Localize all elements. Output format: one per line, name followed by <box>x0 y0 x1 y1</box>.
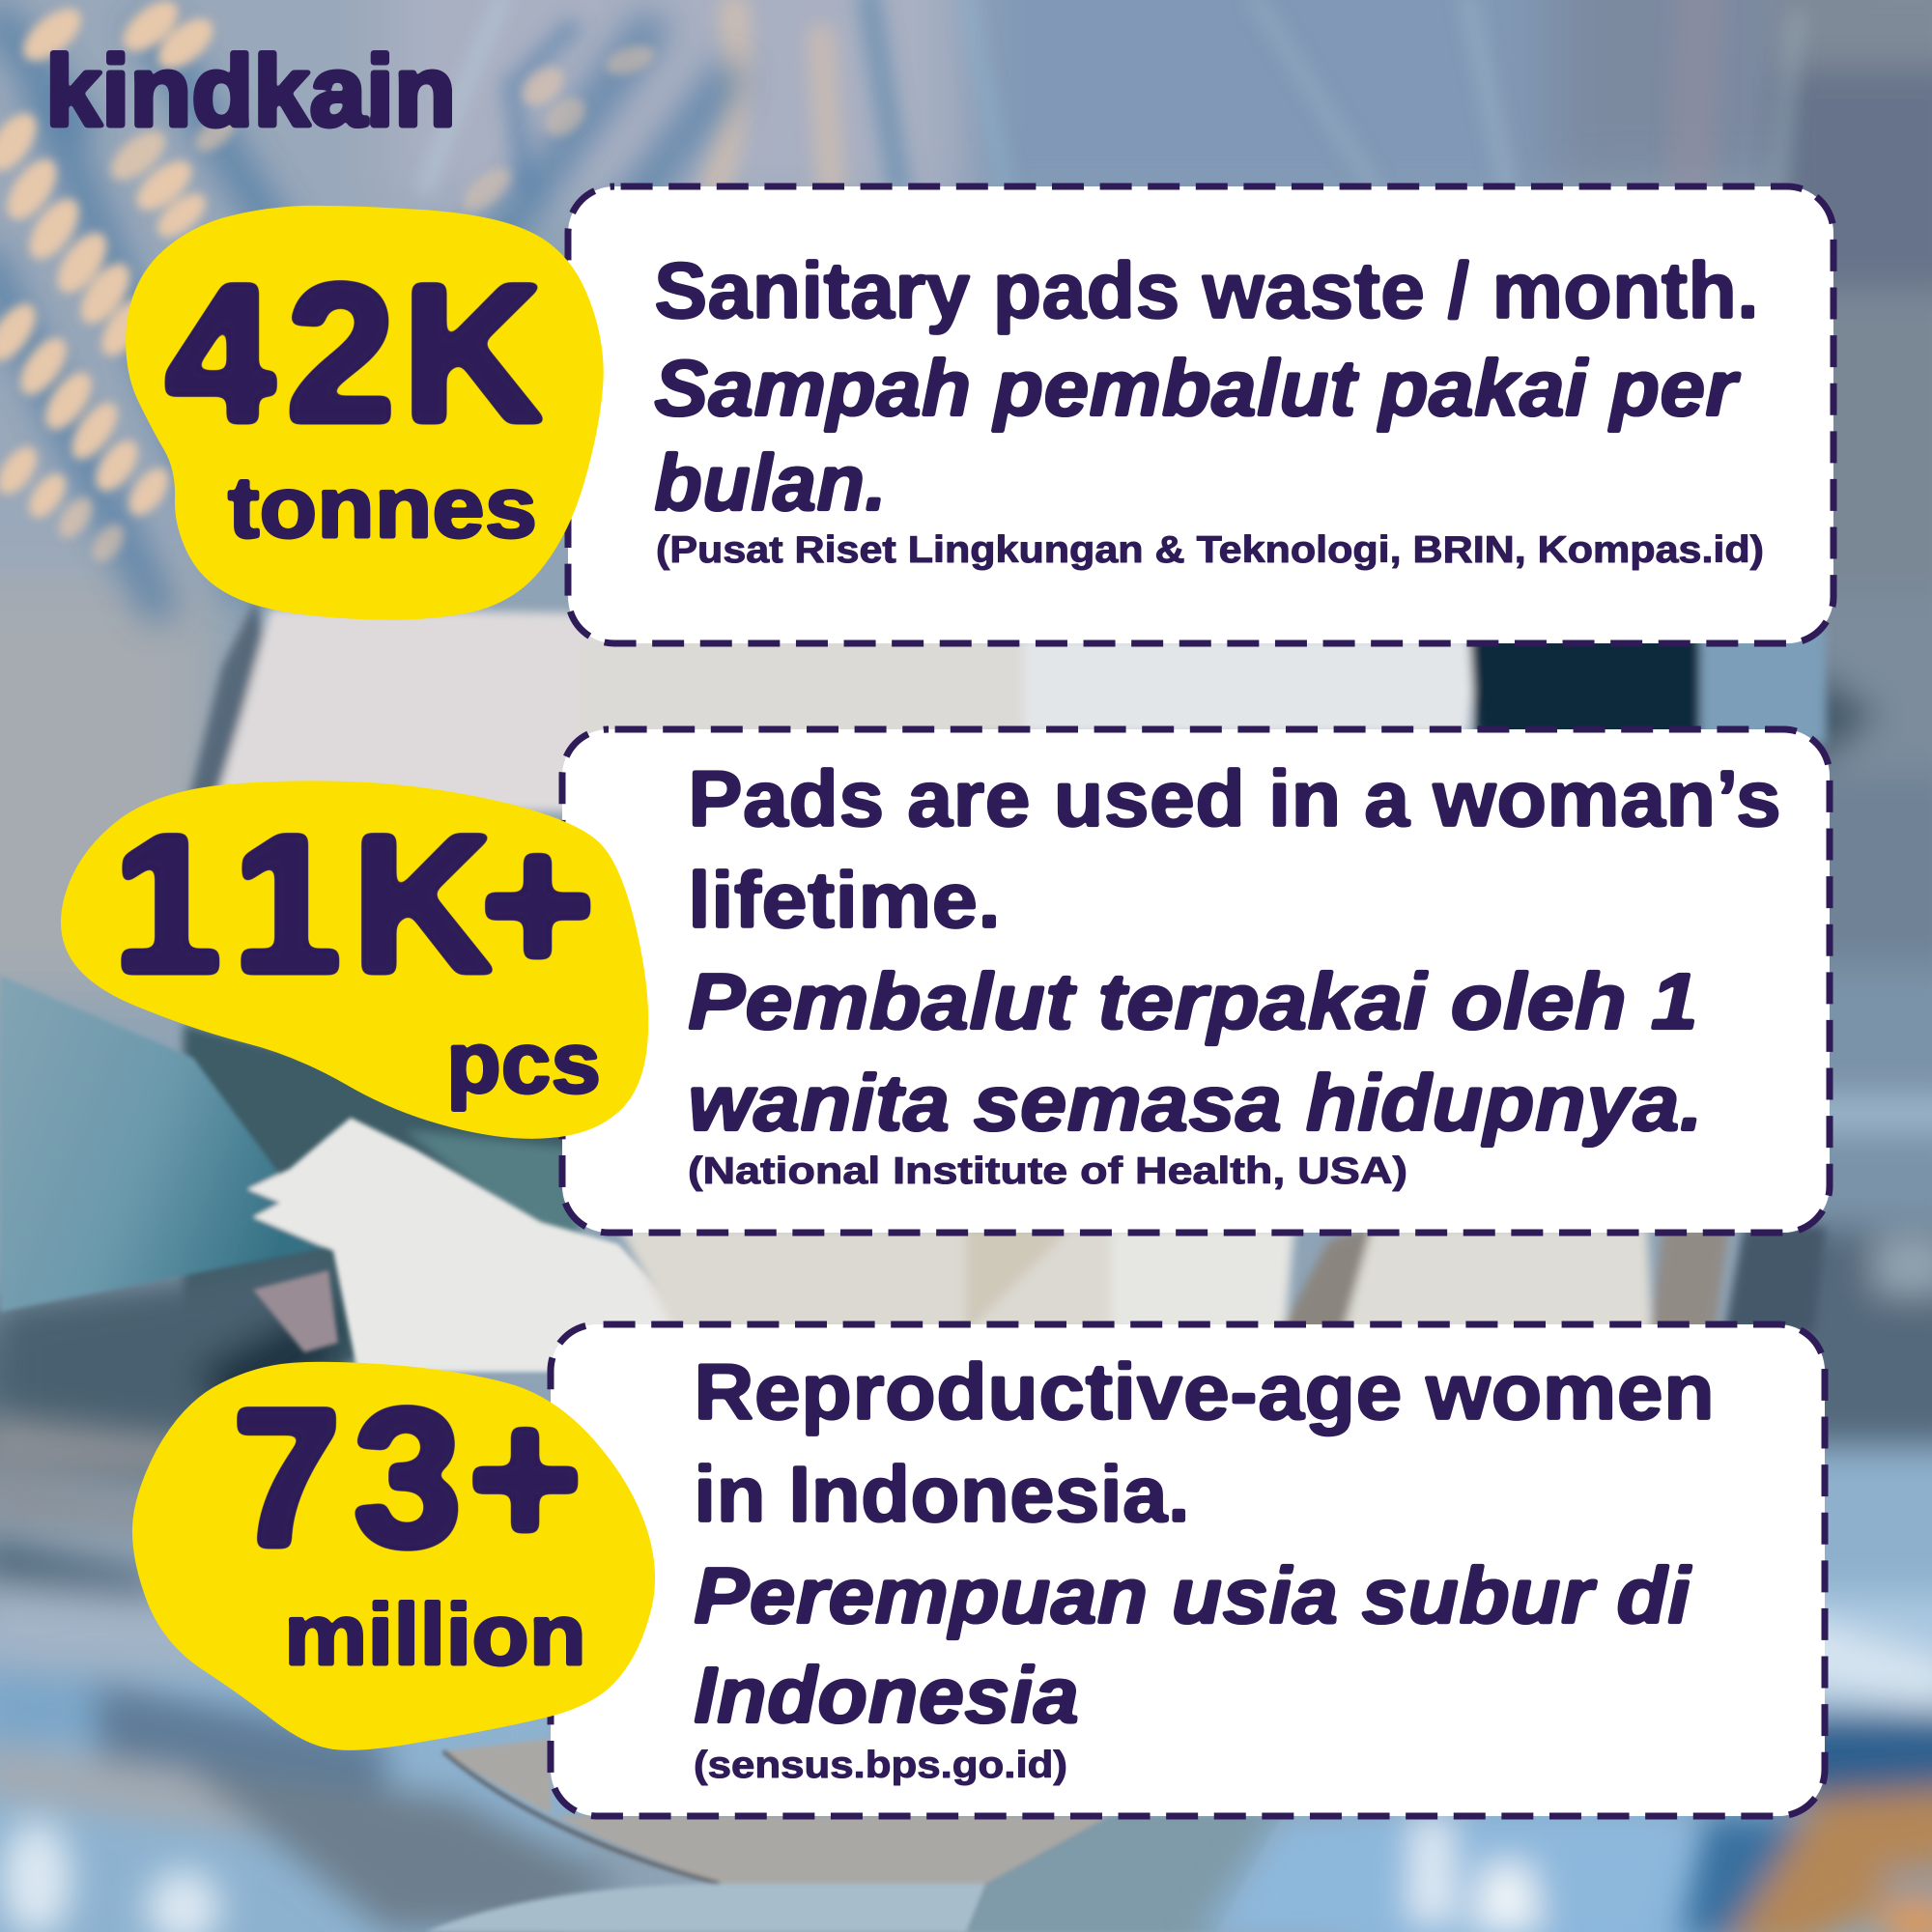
text block: Indonesian description: Pembalut terpakai oleh 1 <box>688 956 1698 1046</box>
panel: sanitary pads waste <box>568 186 1833 643</box>
panel: pads per lifetime <box>562 729 1830 1233</box>
right edge streaks <box>1681 0 1932 1932</box>
number: 73+ <box>232 1368 582 1588</box>
heading: English stat description <box>694 1347 1715 1539</box>
logo: kindkain: kindkain <box>45 36 456 148</box>
teal plastic and dark hollow, left <box>184 1024 580 1372</box>
text block: Indonesian description <box>654 343 1742 527</box>
heading: English stat description: Reproductive-age women <box>694 1347 1715 1436</box>
source citation: (Pusat Riset Lingkungan & Teknologi, BRIN, Kompas.id) <box>656 529 1764 571</box>
callout: 73+ million <box>132 1362 655 1750</box>
text block: Indonesian description: Sampah pembalut pakai per <box>654 343 1742 433</box>
plastic wisps along top band <box>425 0 1797 188</box>
number: 11K+ <box>112 794 595 1014</box>
number: 42K <box>165 243 544 464</box>
lower-left blurred plastic streaks <box>0 1415 628 1932</box>
unit: million <box>284 1587 586 1684</box>
sack and bottom plastic <box>425 1739 1282 1932</box>
panel: reproductive-age women <box>551 1324 1825 1816</box>
source citation: (sensus.bps.go.id) <box>694 1745 1067 1786</box>
callout: 11K+ pcs <box>61 781 648 1139</box>
heading: English stat description: Pads are used in a woman’s <box>688 753 1781 843</box>
unit: pcs <box>446 1015 601 1112</box>
text block: Indonesian description: bulan. <box>654 438 887 527</box>
unit: tonnes <box>228 460 537 556</box>
woven basket pattern top-left <box>0 0 734 618</box>
text block: Indonesian description: Indonesia <box>694 1650 1079 1740</box>
text block: Indonesian description: wanita semasa hidupnya. <box>688 1058 1703 1148</box>
text block: Indonesian description: Perempuan usia subur di <box>694 1550 1692 1640</box>
text block: Indonesian description <box>688 956 1703 1148</box>
heading: English stat description: Sanitary pads waste / month. <box>654 245 1759 335</box>
callout: 42K tonnes <box>126 206 604 620</box>
white pads and mid band <box>188 599 1826 840</box>
text block: Indonesian description <box>694 1550 1692 1740</box>
band between second and third panels <box>618 1227 1826 1333</box>
heading: English stat description: in Indonesia. <box>694 1449 1190 1539</box>
source citation: (National Institute of Health, USA) <box>688 1151 1407 1192</box>
torn white tissue <box>247 1118 688 1372</box>
heading: English stat description <box>688 753 1781 945</box>
heading: English stat description: lifetime. <box>688 855 1001 945</box>
